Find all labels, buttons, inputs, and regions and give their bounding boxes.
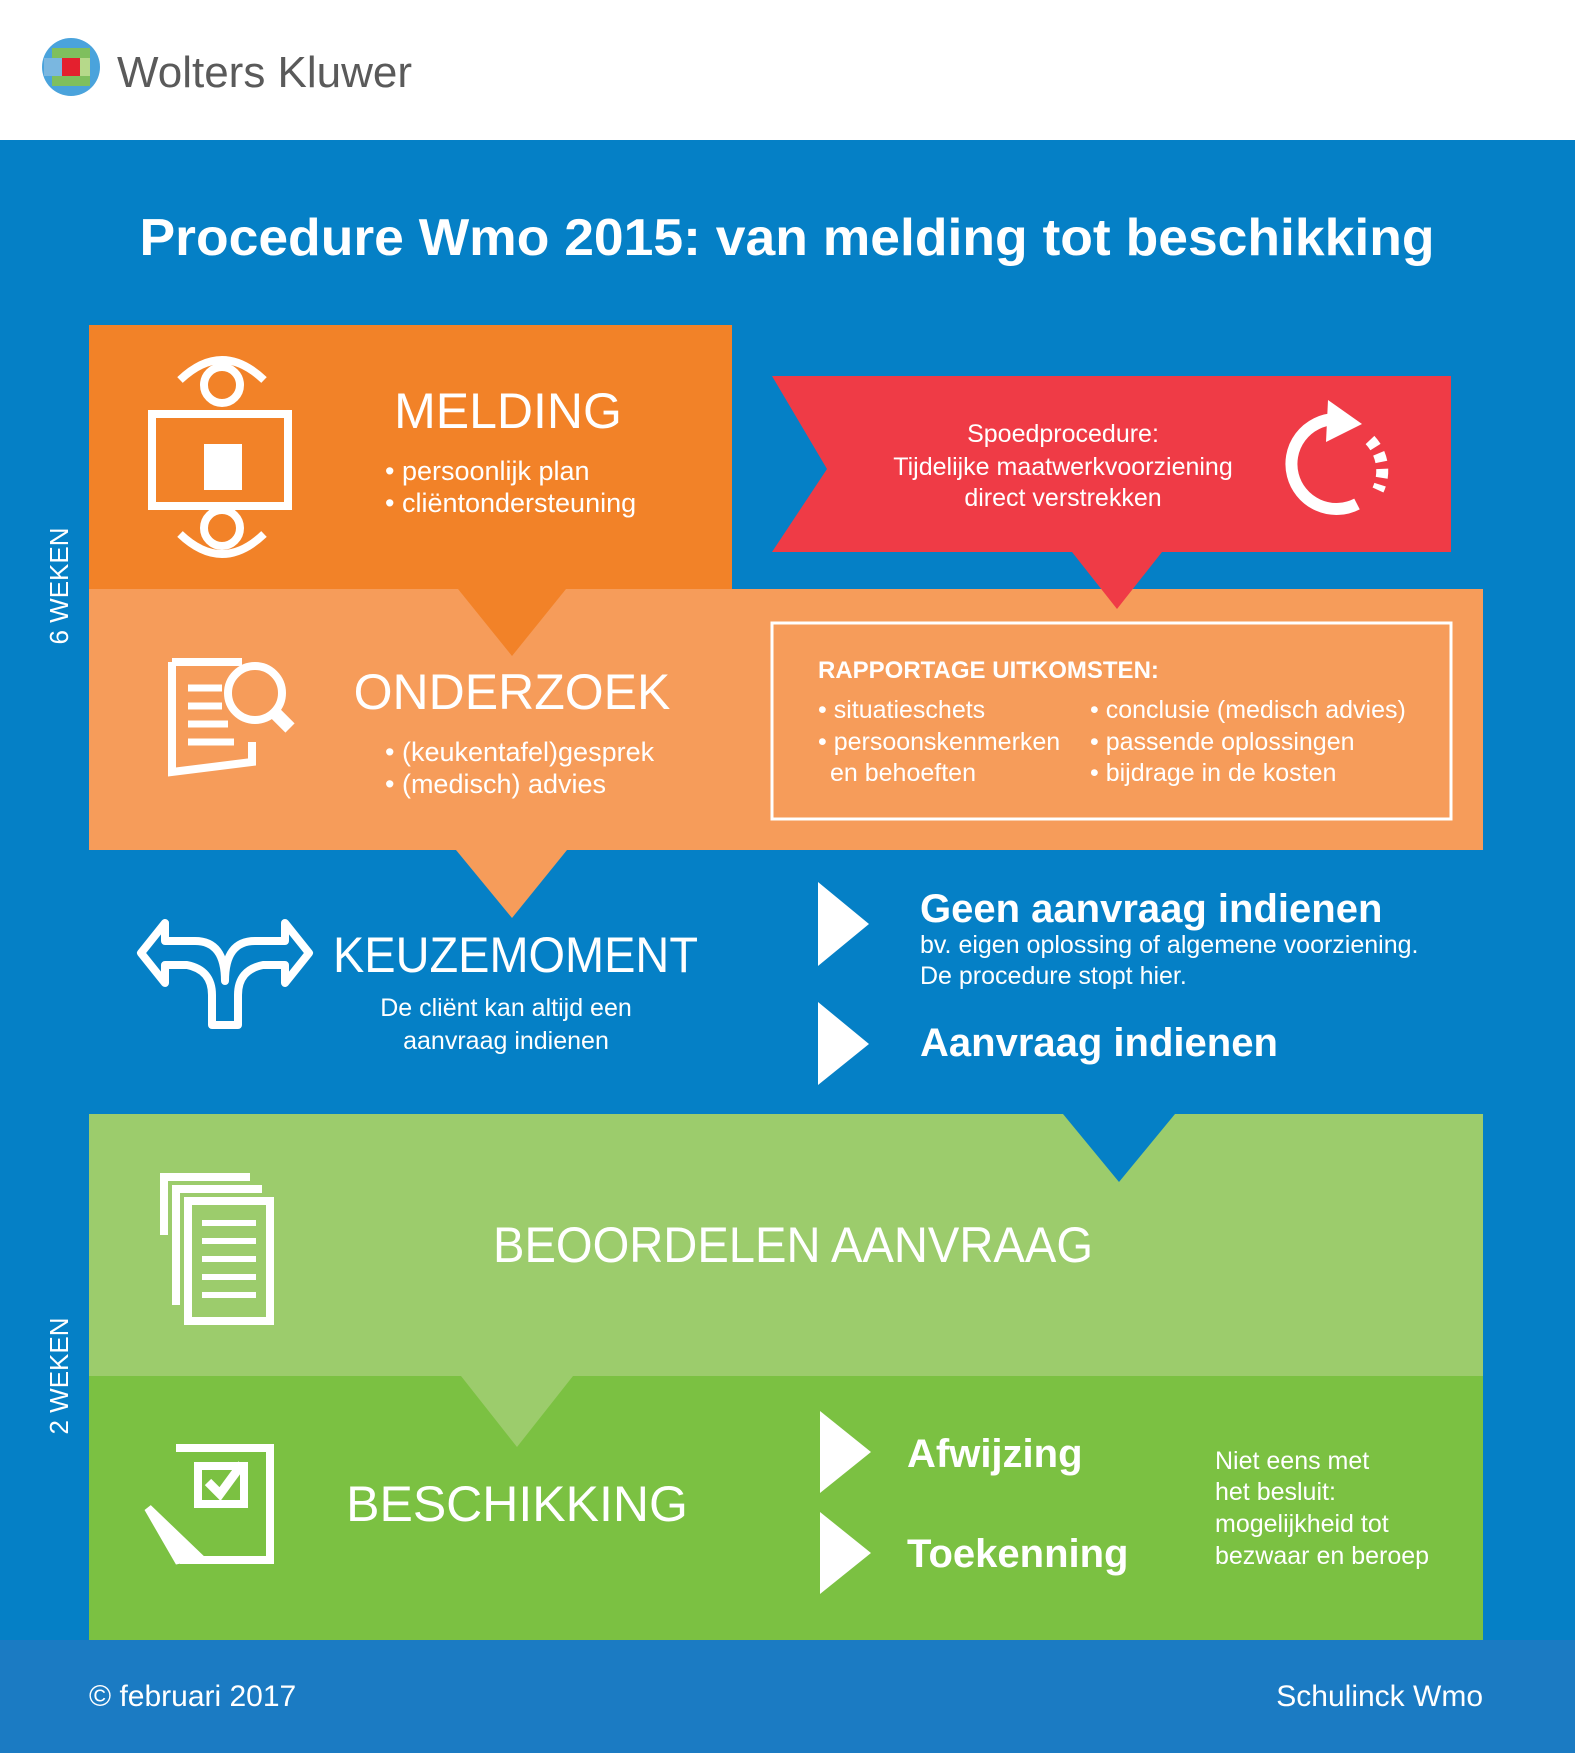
option: geen aanvraag indienen: bv. eigen oplossing of algemene voorziening.: [920, 931, 1418, 959]
option: geen aanvraag indienen: De procedure stopt hier.: [920, 962, 1187, 990]
icon: meeting table: [152, 360, 288, 554]
box: rapportage uitkomsten: • situatieschets: [818, 696, 985, 724]
panel: beschikking: BESCHIKKING: [346, 1476, 688, 1532]
panel: beoordelen aanvraag: [89, 1114, 1483, 1447]
icon: refresh: [1291, 400, 1382, 509]
panel: beschikking: bezwaar en beroep: [1215, 1542, 1429, 1570]
header: logo: [42, 38, 412, 97]
footer right text: Schulinck Wmo: [1276, 1680, 1483, 1713]
panel: keuzemoment: KEUZEMOMENT: [333, 927, 698, 983]
arrow: melding to onderzoek: [458, 589, 566, 656]
panel: keuzemoment: [141, 923, 698, 1055]
panel: beschikking: Toekenning: [907, 1532, 1128, 1576]
box: rapportage uitkomsten: RAPPORTAGE UITKOMSTEN:: [818, 657, 1159, 684]
label: 2 weken: 2 WEKEN: [44, 1317, 74, 1435]
panel: beschikking: het besluit:: [1215, 1478, 1336, 1506]
box: rapportage uitkomsten: • passende oplossingen: [1090, 728, 1355, 756]
note: bezwaar: Niet eens met: [1215, 1447, 1369, 1475]
icon: document magnifier: [172, 662, 290, 772]
panel: beschikking: mogelijkheid tot: [1215, 1510, 1389, 1538]
bullets: • persoonlijk plan: [385, 456, 590, 486]
option: geen aanvraag indienen: Geen aanvraag indienen: [920, 887, 1382, 931]
panel: beschikking: Afwijzing: [907, 1432, 1083, 1476]
panel: keuzemoment: De cliënt kan altijd een: [380, 994, 632, 1022]
panel: keuzemoment: aanvraag indienen: [403, 1027, 609, 1055]
panel: melding: [89, 325, 732, 656]
panel: spoedprocedure: direct verstrekken: [964, 484, 1162, 512]
panel: onderzoek: • (medisch) advies: [385, 769, 606, 799]
box: rapportage uitkomsten: en behoeften: [830, 759, 976, 787]
icon: stacked documents: [164, 1177, 270, 1321]
option: afwijzing: [820, 1411, 871, 1493]
option: aanvraag indienen: Aanvraag indienen: [920, 1021, 1278, 1065]
arrow: onderzoek to keuzemoment: [456, 850, 567, 918]
option: aanvraag indienen: [818, 1002, 1278, 1085]
box: rapportage uitkomsten: • persoonskenmerken: [818, 728, 1060, 756]
panel: beschikking: [89, 1376, 1483, 1640]
panel: melding: • cliëntondersteuning: [385, 488, 636, 518]
bullets: • (keukentafel)gesprek: [385, 737, 655, 767]
box: rapportage uitkomsten: • bijdrage in de kosten: [1090, 759, 1336, 787]
panel: spoedprocedure: [772, 376, 1451, 609]
footer left text: © februari 2017: [89, 1680, 296, 1713]
panel: beoordelen aanvraag: BEOORDELEN AANVRAAG: [493, 1217, 1093, 1273]
label: 6 weken: 6 WEKEN: [44, 527, 74, 645]
title: Procedure Wmo 2015: van melding tot beschikking: [140, 209, 1434, 267]
option: toekenning: [820, 1512, 871, 1594]
option: geen aanvraag indienen: [818, 882, 1418, 990]
footer: [0, 1640, 1575, 1753]
logo text: Wolters Kluwer: [117, 48, 412, 97]
icon: checklist pen: [148, 1448, 270, 1560]
panel: onderzoek: [89, 589, 1483, 850]
heading: MELDING: [394, 383, 622, 439]
box: rapportage uitkomsten: • conclusie (medisch advies): [1090, 696, 1406, 724]
icon: split arrow: [141, 923, 309, 1025]
box: rapportage uitkomsten: [772, 623, 1451, 819]
heading: ONDERZOEK: [354, 664, 670, 720]
panel: spoedprocedure: Tijdelijke maatwerkvoorziening: [893, 453, 1233, 481]
icon: logo globe: [42, 38, 100, 96]
panel: spoedprocedure: Spoedprocedure:: [967, 420, 1159, 448]
